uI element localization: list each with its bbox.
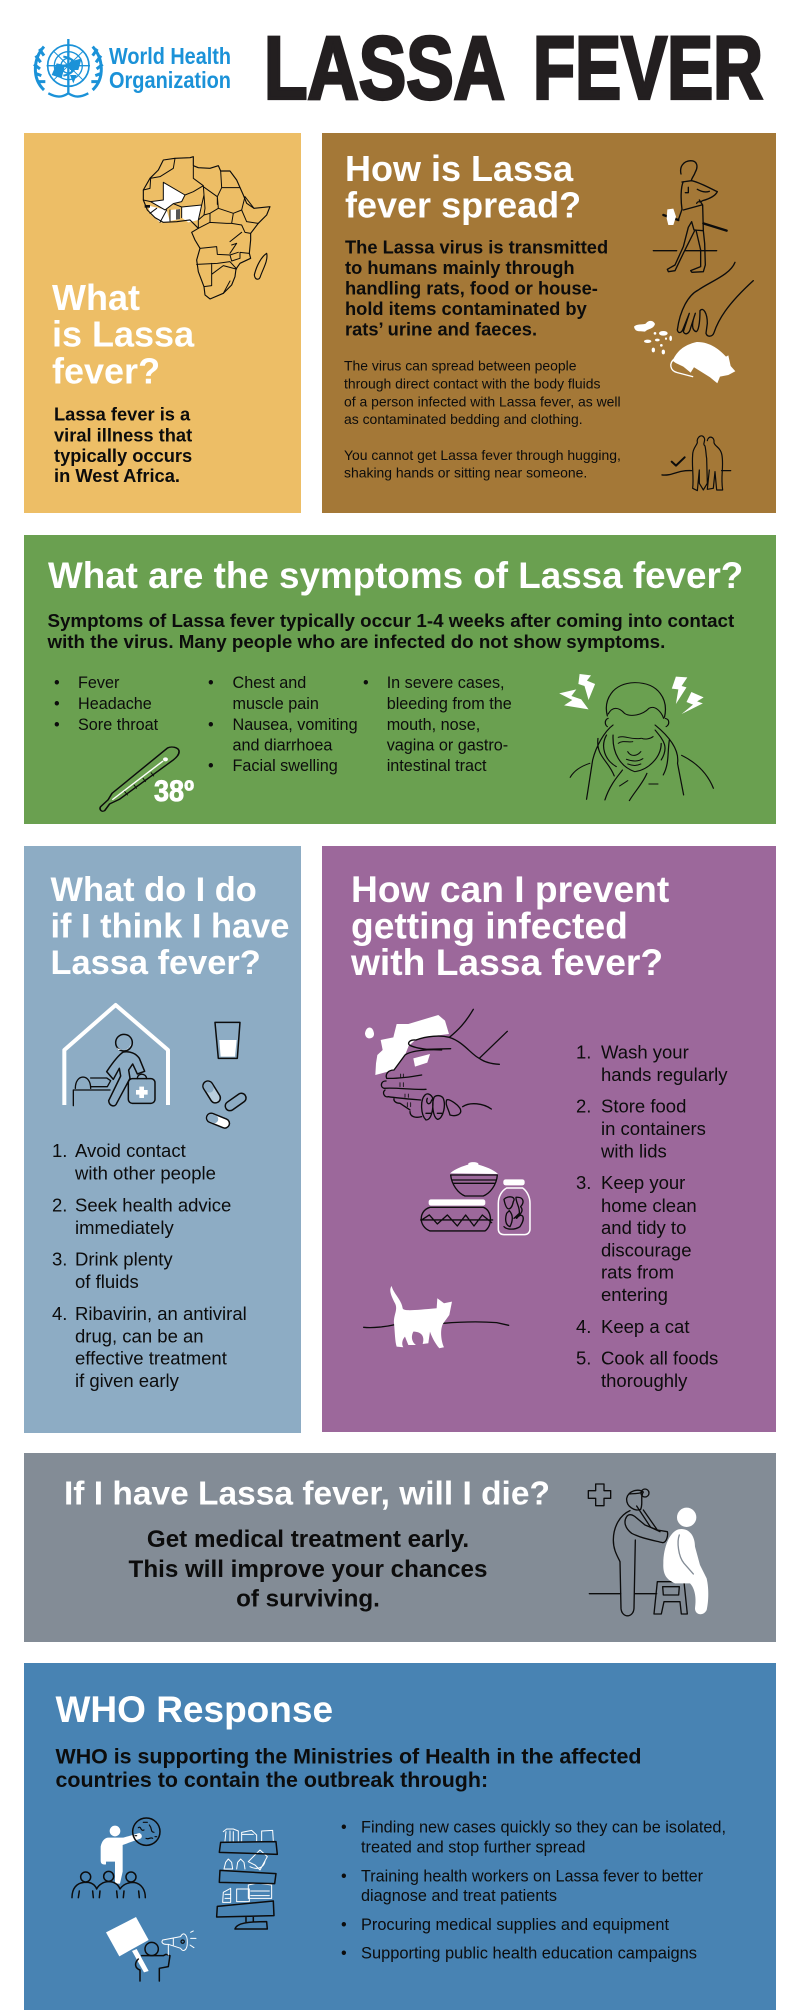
icon: shelves of supplies [217,1829,277,1929]
symptom list column 2: Chest and [232,674,306,692]
panel: what do I do [24,846,301,1433]
icon: WHO emblem [34,39,103,97]
prevention list: Store food [601,1096,686,1117]
advice text: of surviving. [236,1586,380,1612]
icon: presenter with audience [72,1818,160,1898]
response list: diagnose and treat patients [361,1887,557,1905]
body text: shaking hands or sitting near someone. [344,465,587,481]
panel: what is Lassa fever [24,133,301,513]
icon: food containers [421,1162,530,1235]
symptom list column 3: intestinal tract [387,757,487,775]
intro text [56,1745,641,1792]
symptom list column 1: • [54,674,60,692]
body text: You cannot get Lassa fever through hugging, [344,447,621,463]
heading: If I have Lassa fever, will I die? [64,1476,550,1512]
bold transmission text: hold items contaminated by [345,298,588,319]
prevention list: Wash your [601,1042,689,1062]
logo wordmark: World Health [109,43,231,69]
prevention list: and tidy to [601,1217,686,1238]
heading: Lassa fever? [50,944,261,982]
advice text: Get medical treatment early. [147,1526,469,1553]
icon: pills [201,1079,248,1129]
body text [344,358,621,481]
intro text: with the virus. Many people who are infected do not show symptoms. [46,631,665,652]
body text: The virus can spread between people [344,358,577,374]
icon: cat [364,1286,509,1348]
response list: • [341,1916,347,1934]
icon: washing hands [365,1009,507,1120]
prevention list: with lids [600,1141,667,1162]
symptom list column 1 [54,674,159,734]
symptom list column 3: bleeding from the [387,695,512,713]
icon: person with stick [653,161,727,272]
heading: WHO Response [56,1689,333,1730]
response list: • [341,1944,347,1962]
body text: as contaminated bedding and clothing. [344,411,583,427]
action list: 3. [52,1249,67,1270]
response list: treated and stop further spread [361,1839,586,1857]
prevention list: Keep your [601,1172,685,1193]
action list: Ribavirin, an antiviral [75,1303,247,1324]
heading: getting infected [351,904,628,946]
heading [52,277,195,391]
intro text: viral illness that [54,424,192,446]
symptom list column 3: • [363,674,369,692]
response list: Finding new cases quickly so they can be isolated, [361,1819,726,1837]
panel: symptoms [24,535,776,824]
response list: • [341,1819,347,1837]
bold transmission text: to humans mainly through [345,257,575,278]
intro text: Lassa fever is a [54,404,191,425]
icon: glass of water [215,1022,240,1058]
symptom list column 1: Headache [78,695,152,713]
icon: thermometer 38 degrees [100,747,194,811]
prevention list: hands regularly [601,1064,728,1085]
body text: through direct contact with the body fluids [344,376,600,392]
prevention list: 3. [576,1172,591,1193]
symptom list column 3: In severe cases, [387,674,505,692]
heading: How is Lassa [345,148,574,189]
symptom list column 2: Facial swelling [232,757,338,775]
symptom list column 3 [363,674,512,775]
symptom list column 1: • [54,695,60,713]
intro text [54,404,192,486]
symptom list column 1: Sore throat [78,716,159,734]
action list: 1. [52,1140,67,1161]
prevention list: discourage [601,1240,692,1260]
symptom list column 2: • [208,674,214,692]
logo wordmark: Organization [109,67,231,93]
panel: how is Lassa fever spread [322,133,776,513]
bold transmission text: rats’ urine and faeces. [345,318,537,339]
action list: of fluids [75,1271,139,1292]
intro text: countries to contain the outbreak through: [56,1768,488,1792]
intro text [46,610,735,652]
symptom list column 2: muscle pain [232,695,319,713]
heading [350,868,669,983]
intro text: WHO is supporting the Ministries of Health in the affected [56,1745,641,1769]
symptom list column 3: vagina or gastro- [387,736,508,754]
symptom list column 2: • [208,716,214,734]
action list [52,1140,247,1391]
WHO logo [34,39,231,97]
response list: Training health workers on Lassa fever to better [361,1868,704,1886]
logo wordmark [109,43,231,93]
heading: What are the symptoms of Lassa fever? [48,555,743,596]
response list: Supporting public health education campaigns [361,1944,697,1962]
symptom list column 2 [208,674,358,775]
action list: drug, can be an [75,1326,204,1346]
symptom list column 1: Fever [78,674,120,692]
symptom list column 2: Nausea, vomiting [232,716,358,734]
icon: hand and rat with droppings [634,262,753,383]
bold transmission text: The Lassa virus is transmitted [345,236,608,257]
heading [345,148,581,225]
action list: 2. [52,1194,67,1216]
heading [50,871,289,982]
heading: fever spread? [345,184,581,225]
prevention list: Cook all foods [601,1348,718,1368]
bold transmission text [345,236,608,339]
prevention list: 5. [576,1348,591,1368]
icon: health worker in house [64,1005,168,1106]
body text: of a person infected with Lassa fever, as well [344,393,621,409]
action list: Drink plenty [75,1249,173,1270]
action list: Seek health advice [75,1194,231,1216]
intro text: in West Africa. [54,465,180,486]
icon: campaigner with sign and megaphone [106,1917,196,1981]
intro text: Symptoms of Lassa fever typically occur 1-4 weeks after coming into contact [48,610,735,631]
title: LASSA [264,17,505,117]
panel: will I die [24,1453,776,1642]
intro text: typically occurs [54,445,192,466]
symptom list column 2: and diarrhoea [232,736,332,754]
prevention list: rats from [601,1262,674,1283]
prevention list: thoroughly [601,1370,688,1391]
action list: effective treatment [75,1348,227,1368]
panel: how can I prevent [322,846,776,1432]
response list [341,1819,726,1962]
prevention list: 4. [576,1316,591,1337]
advice text [129,1526,487,1612]
prevention list: Keep a cat [601,1316,689,1337]
prevention list [576,1042,728,1391]
heading: How can I prevent [351,868,669,910]
prevention list: home clean [601,1195,697,1216]
heading: What do I do [50,871,257,909]
prevention list: 1. [576,1042,591,1062]
heading: What [52,277,140,318]
action list: with other people [74,1162,216,1184]
response list: Procuring medical supplies and equipment [361,1916,670,1934]
heading: with Lassa fever? [350,941,663,983]
symptom list column 3: mouth, nose, [387,716,480,734]
action list: if given early [75,1370,180,1391]
icon: doctor examining patient [588,1484,708,1616]
advice text: This will improve your chances [129,1556,487,1583]
heading: is Lassa [52,314,195,355]
symptom list column 1: • [54,716,60,734]
prevention list: in containers [601,1118,706,1139]
action list: Avoid contact [75,1140,186,1161]
icon: two people hugging [662,436,731,491]
icon: man with headache [559,674,713,801]
action list: immediately [75,1217,174,1238]
response list: • [341,1868,347,1886]
icon: map of Africa [143,157,270,299]
prevention list: entering [601,1284,668,1305]
title [264,17,763,117]
heading: if I think I have [50,908,289,946]
icon: thermometer 38 degrees: 38º [154,775,194,808]
action list: 4. [52,1303,67,1324]
panel: WHO response [24,1663,776,2010]
symptom list column 2: • [208,757,214,775]
bold transmission text: handling rats, food or house- [345,278,598,299]
heading: fever? [52,350,160,391]
prevention list: 2. [576,1096,591,1117]
